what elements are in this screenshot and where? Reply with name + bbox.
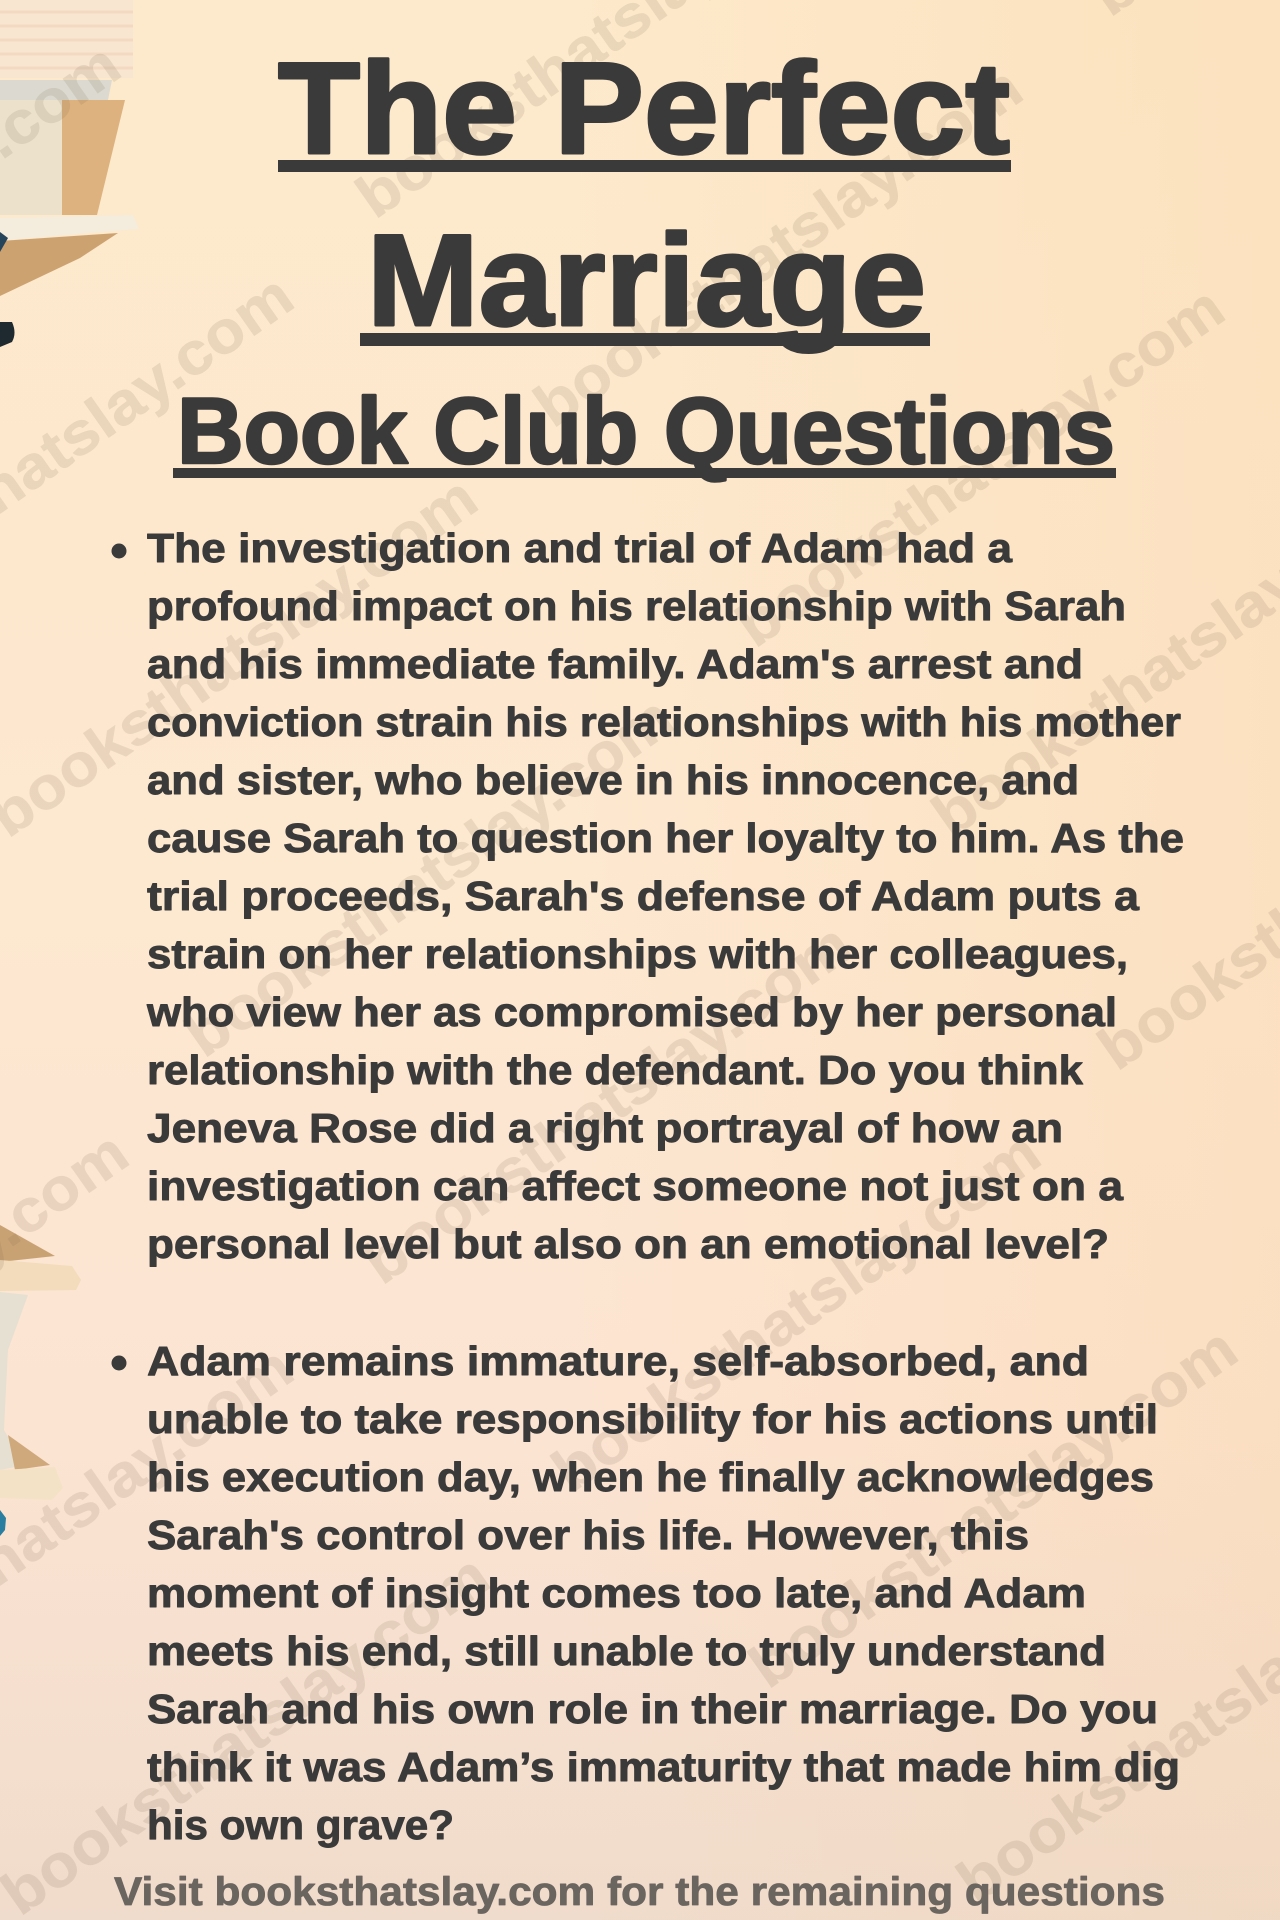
watermarks: booksthatslay.com [522, 53, 1034, 440]
question 2 text block: moment of insight comes too late, and Adam [147, 1570, 1086, 1616]
question 2 text block: think it was Adam’s immaturity that made him dig [147, 1744, 1180, 1790]
question 2 text block: Adam remains immature, self-absorbed, and [147, 1338, 1089, 1384]
watermarks: booksthatslay.com [173, 683, 685, 1070]
title: Marriage [367, 207, 926, 353]
question 1 text block: and his immediate family. Adam's arrest and [147, 641, 1083, 687]
question 1 text block: who view her as compromised by her personal [146, 989, 1117, 1035]
subtitle: Book Club Questions [177, 378, 1115, 483]
question 1 text block: trial proceeds, Sarah's defense of Adam puts a [147, 873, 1140, 919]
question 1 text block: Jeneva Rose did a right portrayal of how an [147, 1105, 1063, 1151]
question 2 text block: his own grave? [147, 1802, 454, 1848]
question 1 text block: investigation can affect someone not just on a [147, 1163, 1124, 1209]
watermarks: booksthatslay.com [724, 273, 1236, 660]
watermarks: booksthatslay.com [737, 1314, 1249, 1701]
title [278, 35, 1011, 353]
question 2 text block: Sarah's control over his life. However, this [147, 1512, 1029, 1558]
question 1 text block: cause Sarah to question her loyalty to him. As the [147, 815, 1184, 861]
question 1 text block: strain on her relationships with her colleagues, [147, 931, 1128, 977]
question 1 text block: conviction strain his relationships with his mother [147, 699, 1181, 745]
question 1 text block: The investigation and trial of Adam had a [147, 525, 1013, 571]
watermarks: booksthatslay.com [351, 910, 863, 1297]
bullet 2 [112, 1356, 126, 1370]
watermarks: booksthatslay.com [540, 1118, 1052, 1505]
question 2 text block: his execution day, when he finally acknowledges [147, 1454, 1154, 1500]
question 2 text block [112, 1338, 1180, 1848]
title: The Perfect [278, 35, 1010, 181]
question 1 text block [112, 525, 1184, 1267]
question 2 text block: Sarah and his own role in their marriage. Do you [147, 1686, 1158, 1732]
question 2 text block: meets his end, still unable to truly understand [147, 1628, 1106, 1674]
question 2 text block: unable to take responsibility for his actions until [147, 1396, 1158, 1442]
question 1 text block: and sister, who believe in his innocence, and [147, 757, 1079, 803]
question 1 text block: profound impact on his relationship with Sarah [147, 583, 1126, 629]
icon: stack of books, upper left [0, 0, 139, 347]
question 1 text block: personal level but also on an emotional level? [147, 1221, 1109, 1267]
bullet 1 [112, 544, 126, 558]
question 1 text block: relationship with the defendant. Do you think [147, 1047, 1083, 1093]
footer call to action: Visit booksthatslay.com for the remaining questions [114, 1870, 1165, 1914]
icon: stack of books, lower left [0, 1225, 81, 1536]
